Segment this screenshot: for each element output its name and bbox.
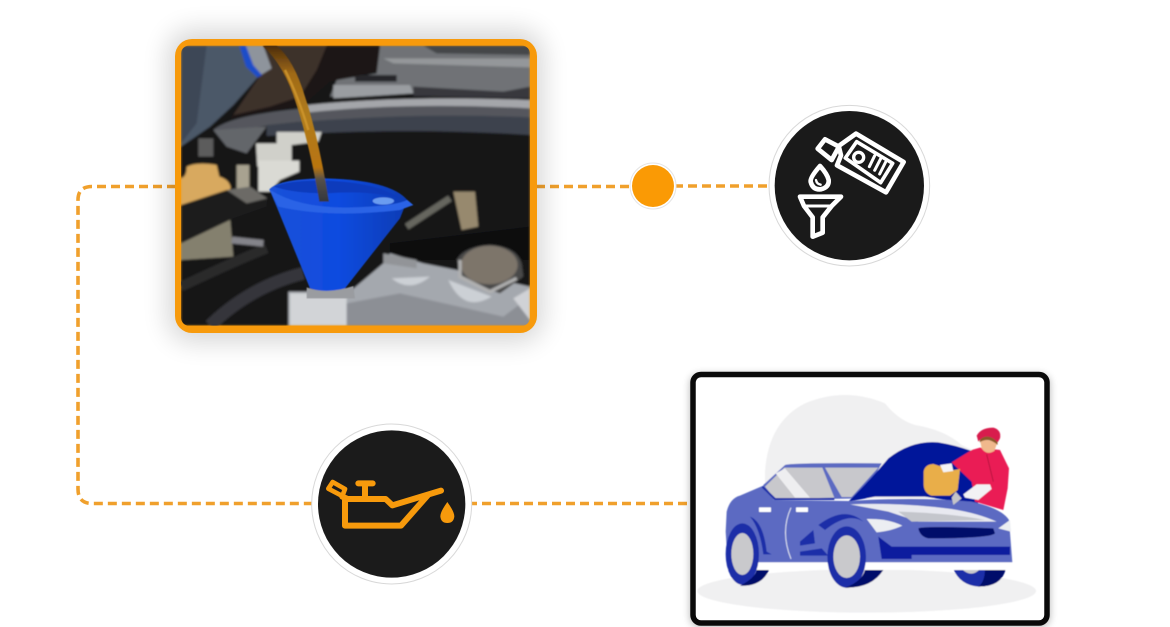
photo: white engine block	[256, 132, 322, 170]
photo: dark brown backdrop behind oil	[262, 46, 378, 110]
illustration: background blob	[765, 395, 1005, 498]
illustration: door details	[759, 507, 771, 512]
photo: oil stream	[263, 46, 329, 202]
photo: yellow reservoir	[181, 164, 231, 207]
illustration: oil can	[924, 464, 960, 496]
illustration: car roof and windows	[763, 463, 882, 500]
icon: oil bottle pouring into funnel	[769, 105, 930, 266]
photo: black hoses	[181, 189, 246, 244]
illustration: raised hood	[848, 442, 978, 505]
photo: chrome band	[212, 105, 530, 131]
panel: engine oil photo	[175, 39, 537, 333]
illustration: front and rear wheels	[726, 523, 759, 585]
illustration: grille	[918, 527, 995, 538]
photo card shadow	[168, 30, 543, 342]
illustration: white sill	[728, 562, 1012, 570]
photo: funnel	[269, 178, 407, 292]
illustration: hood highlight	[850, 504, 997, 522]
photo: lower engine cover	[288, 253, 530, 326]
illustration: car body	[726, 486, 1012, 562]
panel: mechanic and car illustration	[693, 374, 1047, 623]
photo: upper engine cover	[330, 46, 530, 97]
illustration: mechanic	[952, 448, 1009, 510]
car card shadow	[690, 374, 1050, 627]
icon: engine oil warning lamp	[312, 424, 472, 584]
connector: dashed path from photo round to car card	[78, 186, 770, 504]
photo: bottle	[181, 46, 261, 147]
illustration: rear wheels	[953, 569, 1006, 587]
photo: oil cap	[457, 245, 523, 293]
node: orange dot	[630, 163, 676, 209]
illustration: headlights	[867, 519, 902, 532]
illustration: ground shadow	[697, 569, 1036, 613]
